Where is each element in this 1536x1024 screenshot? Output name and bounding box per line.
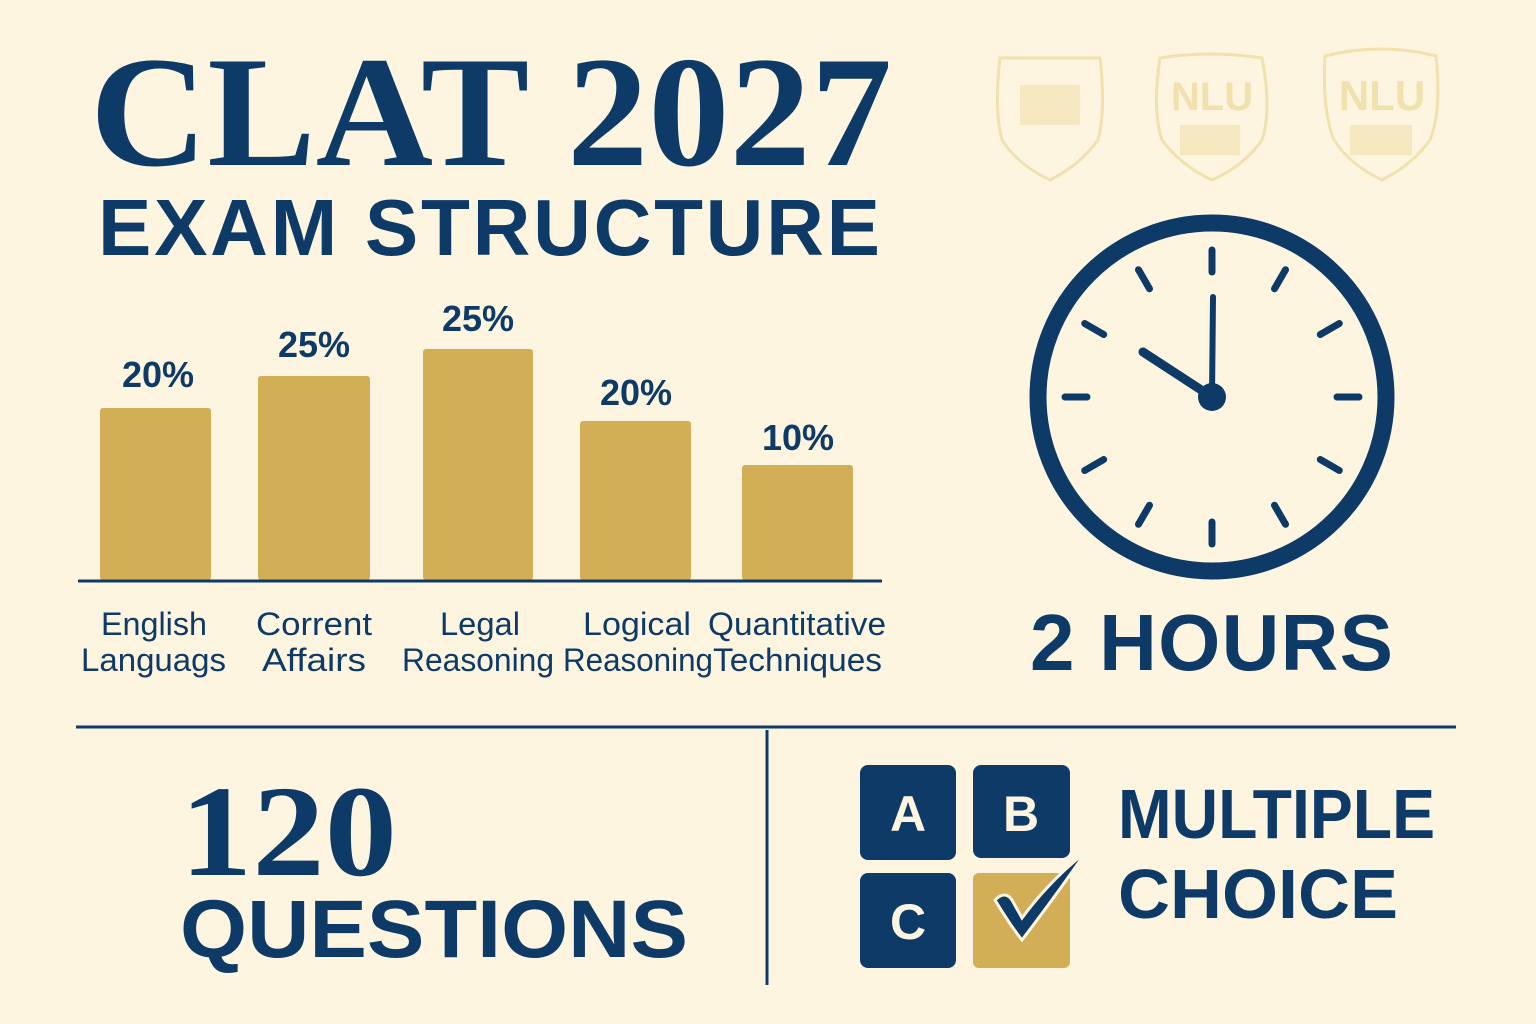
category labels: Logical <box>583 606 691 642</box>
questions count: QUESTIONS <box>180 884 688 975</box>
multiple choice label: MULTIPLE <box>1118 775 1435 853</box>
title <box>90 25 892 272</box>
bar: Quantitative Techniques 10% <box>742 417 853 580</box>
category labels: Reasoning <box>563 642 713 678</box>
bar: Current Affairs 25% <box>258 324 370 580</box>
icon: clock <box>1038 223 1386 571</box>
category labels: English <box>101 606 207 642</box>
logos: faint NLU shields: NLU <box>1171 75 1253 119</box>
bar: Quantitative Techniques 10%: 10% <box>762 417 834 458</box>
category labels: Techniques <box>713 642 882 678</box>
questions count: 120 <box>180 760 397 904</box>
bar: Legal Reasoning 25%: 25% <box>442 298 514 339</box>
bar: Logical Reasoning 20% <box>580 372 691 580</box>
category labels: Reasoning <box>402 642 554 678</box>
category labels: Quantitative <box>708 606 886 642</box>
icon: multiple choice boxes: A <box>890 786 926 842</box>
bar: Current Affairs 25%: 25% <box>278 324 350 365</box>
category labels: Affairs <box>262 642 366 678</box>
bar: Legal Reasoning 25% <box>423 298 533 580</box>
logos: faint NLU shields: NLU <box>1339 72 1425 119</box>
category labels: Legal <box>440 606 520 642</box>
title: CLAT 2027 <box>90 25 892 200</box>
category labels: Languags <box>81 642 226 678</box>
bar: English Language 20%: 20% <box>122 354 194 395</box>
icon: multiple choice boxes: C <box>890 894 926 950</box>
duration text: 2 HOURS <box>1030 598 1393 687</box>
icon: multiple choice boxes <box>860 765 1086 968</box>
multiple choice label: CHOICE <box>1118 855 1398 933</box>
bar: Logical Reasoning 20%: 20% <box>600 372 672 413</box>
bar: English Language 20% <box>100 354 211 580</box>
category labels <box>81 606 886 678</box>
subtitle: EXAM STRUCTURE <box>98 183 880 272</box>
category labels: Corrent <box>256 606 372 642</box>
icon: multiple choice boxes: B <box>1003 786 1039 842</box>
icon: checkmark <box>995 852 1086 940</box>
questions count <box>180 760 688 975</box>
bar chart <box>78 298 886 678</box>
logos: faint NLU shields <box>997 49 1438 180</box>
multiple choice label <box>1118 775 1435 933</box>
